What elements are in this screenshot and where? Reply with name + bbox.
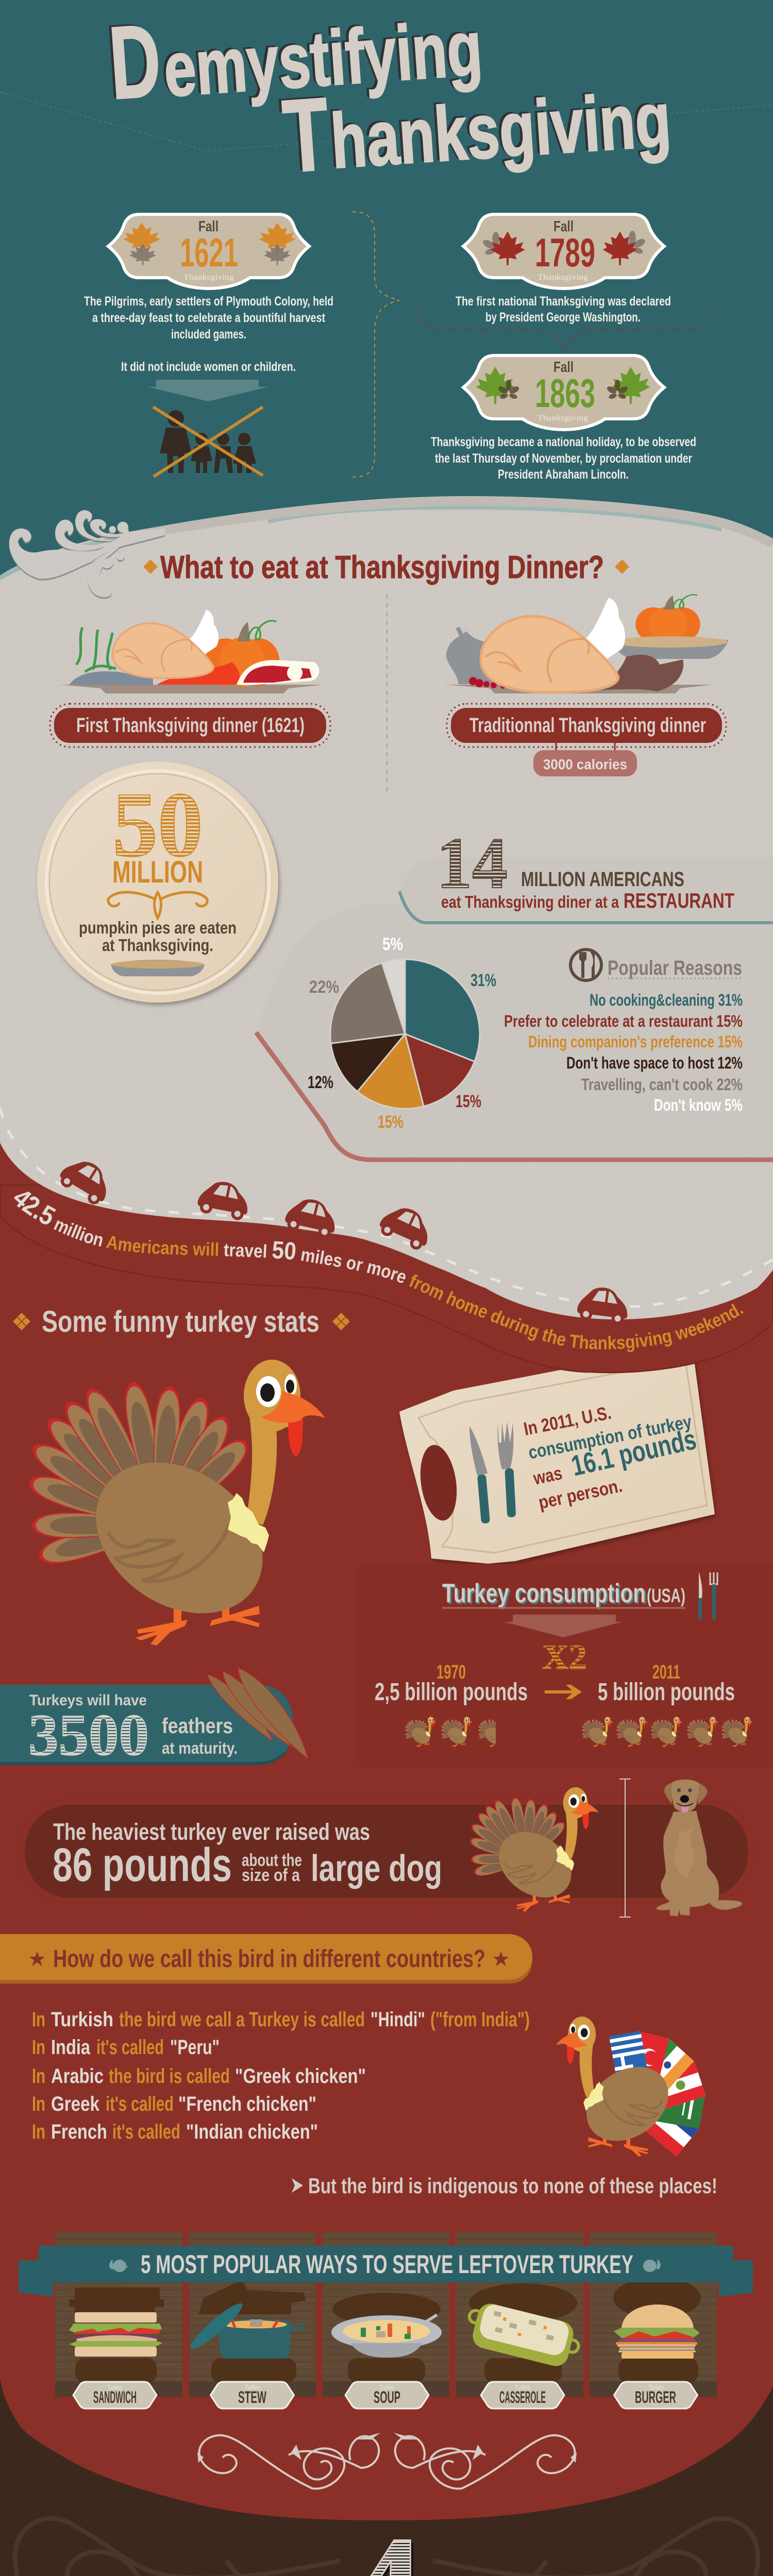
text: bird names list: the bird is called [109, 2065, 230, 2088]
text: pilgrims [84, 294, 333, 374]
text: bird names list: In [32, 2121, 45, 2143]
flags [609, 2030, 705, 2156]
pie chart [330, 959, 480, 1109]
text: bird names list: ("from India") [430, 2008, 530, 2031]
panel: 50 million wood plate [37, 761, 278, 1003]
icon: leaves [481, 231, 647, 265]
text: bird names list: "Greek chicken" [235, 2065, 366, 2088]
panel: reasons background [256, 905, 773, 1157]
panel: 50 million wood plate: at Thanksgiving. [102, 936, 213, 955]
reasons panel edge [256, 1032, 773, 1160]
panel: 14 million: RESTAURANT [624, 889, 734, 912]
labels: food names: STEW [238, 2388, 266, 2406]
panel: heaviest turkey [20, 1779, 753, 1917]
illustration: flag turkey [556, 2016, 705, 2157]
badge: Fall 1621: Fall [198, 218, 219, 235]
legend: popular reasons: Don't know 5% [654, 1096, 743, 1114]
panel: 14 million: 14 [436, 822, 508, 904]
text: consumption stat: 16.1 pounds [568, 1422, 699, 1482]
labels: food names: Turkey [648, 2384, 664, 2392]
icons: turkeys 1970 [405, 1717, 496, 1748]
text: consumption stat [522, 1402, 699, 1513]
title: T [279, 76, 333, 194]
label: 3000 calories [533, 743, 637, 776]
icon: stew pot [187, 2299, 304, 2359]
text: pilgrims: The Pilgrims, early settlers of Plymouth Colony, held [84, 294, 333, 309]
panel: turkey consumption: 2011 [652, 1662, 680, 1683]
text: bird names list: In [32, 2036, 45, 2059]
text: bird names list: it's called [106, 2093, 174, 2115]
header seam [0, 92, 773, 151]
badge: Fall 1863: Fall [553, 359, 574, 376]
text: bird names list: In [32, 2093, 45, 2115]
text: 42.5 million travel: 42.5 million Americans will travel 50 miles or more from home during the Thanksgiving weekend. [13, 1191, 744, 1352]
text: bird names list: Greek [51, 2093, 100, 2115]
text: bird names list: it's called [112, 2121, 180, 2143]
panel: 3500 feathers: 3500 [28, 1702, 149, 1768]
arrow down [504, 1615, 622, 1637]
cutting board with consumption stat [399, 1345, 715, 1564]
ornament: flourish [197, 2433, 577, 2488]
icon: plate with cutlery [569, 948, 603, 982]
panel: turkey consumption: (USA) [647, 1585, 685, 1607]
panel: heaviest turkey: 86 pounds [53, 1839, 232, 1891]
pie labels: 12% [308, 1073, 333, 1092]
icon: casserole [463, 2299, 583, 2370]
title [106, 3, 674, 194]
text: bird names list: "Indian chicken" [186, 2121, 318, 2143]
badge: Fall 1789: Fall [553, 218, 574, 235]
legend: popular reasons: Popular Reasons [608, 957, 742, 979]
pie labels: 15% [378, 1112, 404, 1132]
text: bird names list: In [32, 2008, 45, 2031]
labels: food names: CASSEROLE [499, 2388, 546, 2406]
badge: Fall 1789: Thanksgiving [537, 273, 588, 282]
text: 1789: The first national Thanksgiving was declared [456, 294, 671, 309]
icon: diamonds [143, 560, 629, 574]
text: 1863: the last Thursday of November, by proclamation under [435, 451, 692, 466]
background: red section with arc bottom [0, 1082, 773, 2520]
text: bird names list: Arabic [51, 2065, 104, 2088]
icons: cars [56, 1152, 631, 1326]
ornament [108, 892, 207, 918]
icon: soup bowl [331, 2315, 442, 2358]
panel: turkey consumption [375, 1564, 753, 1748]
height marker [619, 1779, 631, 1917]
text: bird names list: the bird we call a Turkey is called [119, 2008, 365, 2031]
panel: turkey consumption: X2 [542, 1637, 587, 1676]
badge: Fall 1863 [463, 355, 664, 430]
text: bird names list: India [51, 2036, 91, 2059]
labels: food names: SANDWICH [93, 2388, 137, 2406]
divider [386, 595, 388, 796]
text: pilgrims: included games. [171, 327, 246, 342]
panel: turkey consumption: 2,5 billion pounds [375, 1679, 528, 1706]
panel: heaviest turkey: The heaviest turkey ever raised was [53, 1819, 370, 1845]
legend: popular reasons [504, 948, 743, 1114]
icon: small cutlery [698, 1572, 717, 1619]
text: 1863: Thanksgiving became a national holiday, to be observed [431, 435, 696, 449]
labels: food names: Turkey [107, 2384, 123, 2392]
panel: 3500 feathers: feathers [162, 1714, 233, 1738]
label: first thanksgiving [50, 704, 330, 747]
icons: turkeys 2011 [581, 1717, 753, 1747]
badge: Fall 1621: Thanksgiving [183, 273, 234, 282]
heading bar: bird names: How do we call this bird in different countries? [53, 1945, 485, 1973]
panel: 50 million wood plate: 50 [112, 773, 203, 876]
text: pilgrims: It did not include women or children. [121, 360, 296, 374]
text: bird names list: Turkish [51, 2008, 113, 2031]
icon: crossed-out women and children [153, 407, 263, 477]
pie labels: 31% [470, 971, 496, 990]
title: hanksgiving [328, 76, 674, 184]
label: 3000 calories: 3000 calories [543, 756, 627, 772]
panel: 3500 feathers: at maturity. [162, 1739, 238, 1757]
text: consumption stat: consumption of turkey [527, 1411, 694, 1463]
text: bird names list [32, 2008, 530, 2143]
icon: knife and fork [469, 1422, 516, 1524]
banner: 5 most popular ways [19, 2246, 753, 2297]
icons: teapots [109, 2259, 661, 2272]
badge: Fall 1863: Thanksgiving [537, 414, 588, 422]
badge: Fall 1621: 1621 [180, 230, 238, 275]
text: 1789: by President George Washington. [485, 310, 641, 325]
label: first thanksgiving: First Thanksgiving dinner (1621) [76, 714, 305, 737]
icon: feathers [207, 1668, 308, 1759]
timeline bracket [352, 212, 399, 477]
icon: leaves [476, 367, 650, 404]
text: bird names list: French [51, 2121, 107, 2143]
pie labels: 22% [309, 977, 339, 997]
arrow down [148, 380, 268, 401]
badge: Fall 1621 [108, 214, 309, 289]
text: 1863: President Abraham Lincoln. [498, 467, 629, 482]
arc bands under teal header [0, 501, 773, 578]
panel: 50 million wood plate: pumpkin pies are eaten [79, 918, 237, 937]
labels: food names: Turkey [245, 2384, 260, 2392]
panel: turkey consumption: Turkey consumption [444, 1580, 647, 1610]
text: bird names list: "Peru" [170, 2036, 220, 2059]
heading: funny stats: Some funny turkey stats [42, 1305, 320, 1338]
label: traditional [447, 704, 726, 747]
labels: food names [73, 2382, 698, 2409]
illustration: big turkey [26, 1360, 325, 1646]
darker card bottoms [55, 2381, 717, 2397]
food shadows [69, 2277, 701, 2383]
text: bird names list: it's called [96, 2036, 164, 2059]
icon: leaves [123, 223, 296, 265]
badge: Fall 1789: 1789 [535, 230, 595, 275]
text: pilgrims: a three-day feast to celebrate a bountiful harvest [92, 311, 326, 325]
background: teal header [0, 0, 773, 575]
text: consumption stat: per person. [536, 1475, 624, 1513]
icon: pie [111, 960, 205, 976]
panel: heaviest turkey: size of a [242, 1866, 300, 1885]
badge: Fall 1863: 1863 [535, 370, 595, 416]
ornament: corner swirl [9, 510, 165, 599]
panel: heaviest turkey: about the [242, 1851, 302, 1870]
pie labels [308, 935, 496, 1132]
text: 1863 [431, 435, 696, 482]
text: consumption stat: was [531, 1462, 564, 1489]
red road band [0, 1185, 773, 1372]
text: 1789 [456, 294, 671, 325]
labels: food names: Turkey [379, 2384, 395, 2392]
labels: food names: BURGER [635, 2388, 676, 2406]
panel: heaviest turkey: large dog [311, 1848, 442, 1889]
panel: 3500 feathers: Turkeys will have [29, 1692, 147, 1709]
text: consumption stat: In 2011, U.S. [522, 1402, 613, 1439]
panel: leftover wood cards [55, 2232, 717, 2397]
pie labels: 5% [382, 935, 403, 954]
illustration: first thanksgiving plate [59, 610, 323, 693]
illustration: dog [656, 1780, 743, 1916]
icon: burger [614, 2304, 700, 2359]
heading bar: bird names [0, 1934, 532, 1984]
icon: sandwich [69, 2312, 162, 2357]
title: D [106, 3, 164, 121]
board handle hole [416, 1443, 461, 1523]
panel: 14 million: MILLION AMERICANS [521, 868, 684, 891]
panel: 14 million [399, 822, 773, 923]
faint brown flourish background [15, 2519, 758, 2576]
labels: food names: SOUP [374, 2388, 400, 2406]
heading: what to eat: What to eat at Thanksgiving Dinner? [160, 550, 604, 585]
illustration: traditional plate [446, 595, 729, 693]
text: bird names list: "Hindi" [371, 2008, 425, 2031]
background: beige section [0, 464, 773, 1319]
panel: turkey consumption: Turkey consumption [442, 1579, 646, 1608]
text: bird names list: "French chicken" [178, 2093, 316, 2115]
background: brown lower section [0, 2370, 773, 2576]
dotted connector [418, 311, 710, 350]
road guide path [11, 1200, 765, 1349]
pie labels: 15% [456, 1092, 481, 1111]
badge: Fall 1789 [463, 214, 664, 289]
panel: 50 million wood plate: MILLION [112, 855, 203, 889]
illustration: turkey [468, 1787, 598, 1911]
labels: food names: Turkey [515, 2384, 530, 2392]
text: bird names list: In [32, 2065, 45, 2088]
road dashes [0, 1108, 773, 1307]
panel: turkey consumption: 1970 [436, 1662, 466, 1683]
panel: 14 million: eat Thanksgiving diner at a [441, 892, 619, 911]
arrow right [545, 1685, 582, 1699]
panel: 3500 feathers [0, 1668, 308, 1768]
